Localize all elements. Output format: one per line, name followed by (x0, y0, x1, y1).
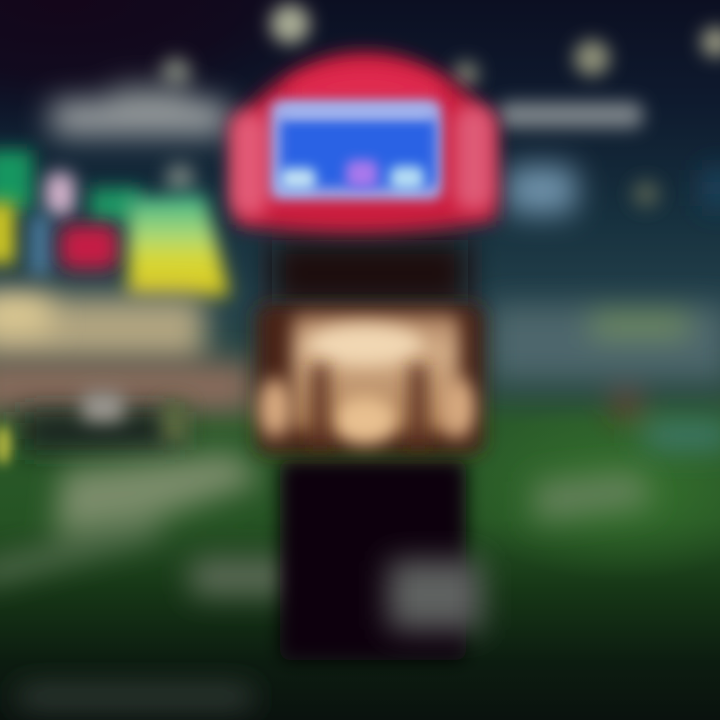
kiosk: blue sign screen (270, 100, 442, 200)
blurred subtitle right (505, 165, 720, 215)
sign text glow top (282, 106, 432, 118)
blurred headline right (498, 102, 643, 128)
stall building left (0, 296, 255, 465)
awning yellow left (0, 202, 15, 264)
kiosk: dark base (280, 460, 466, 660)
blurred headline left (50, 86, 230, 136)
awning pale pink (45, 172, 75, 216)
awning green left (0, 150, 33, 210)
kiosk: neck (272, 240, 468, 306)
awning blue (30, 215, 50, 275)
floodlights (161, 4, 720, 208)
awning yellow green (128, 194, 230, 296)
kiosk: red sign housing (230, 52, 496, 233)
stalls left: colored awnings (0, 150, 230, 296)
kiosk: lit window panel (256, 304, 484, 454)
sign text glow bottom (280, 160, 424, 190)
awning green back (90, 188, 140, 222)
kiosk base text block (388, 560, 482, 630)
pitch markings (0, 452, 652, 706)
awning crimson (60, 225, 118, 269)
stadium stand, right (490, 305, 720, 448)
